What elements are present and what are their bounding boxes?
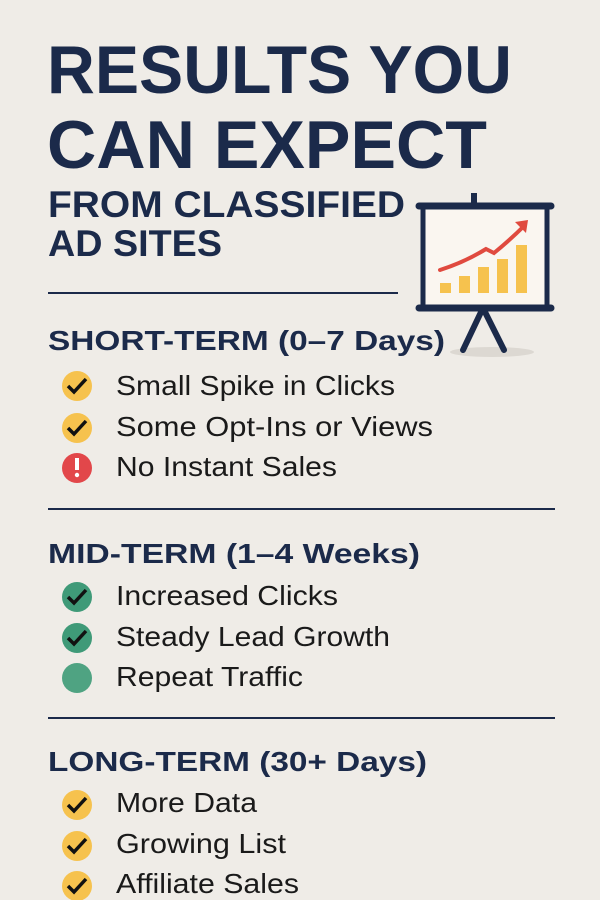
title bbox=[47, 32, 512, 183]
list: short-term: Some Opt-Ins or Views bbox=[116, 411, 433, 442]
section heading: short-term: SHORT-TERM (0–7 Days) bbox=[48, 325, 445, 356]
list: long-term bbox=[62, 787, 299, 900]
subtitle: FROM CLASSIFIED bbox=[48, 184, 405, 225]
list: mid-term: Increased Clicks bbox=[116, 580, 338, 611]
icon: presentation board with chart bbox=[419, 193, 551, 357]
subtitle bbox=[48, 184, 405, 264]
title: RESULTS YOU bbox=[47, 32, 512, 108]
subtitle: AD SITES bbox=[48, 223, 222, 264]
list: long-term: More Data bbox=[116, 787, 257, 818]
list: long-term: Affiliate Sales bbox=[116, 868, 299, 899]
section heading: long-term: LONG-TERM (30+ Days) bbox=[48, 746, 427, 777]
list: short-term: No Instant Sales bbox=[116, 451, 337, 482]
title: CAN EXPECT bbox=[47, 107, 487, 183]
list: long-term: Growing List bbox=[116, 828, 286, 859]
section heading: mid-term: MID-TERM (1–4 Weeks) bbox=[48, 538, 420, 569]
list: short-term bbox=[62, 370, 433, 483]
list: mid-term bbox=[62, 580, 390, 693]
list: mid-term: Repeat Traffic bbox=[116, 661, 303, 692]
list: short-term: Small Spike in Clicks bbox=[116, 370, 395, 401]
list: mid-term: Steady Lead Growth bbox=[116, 621, 390, 652]
